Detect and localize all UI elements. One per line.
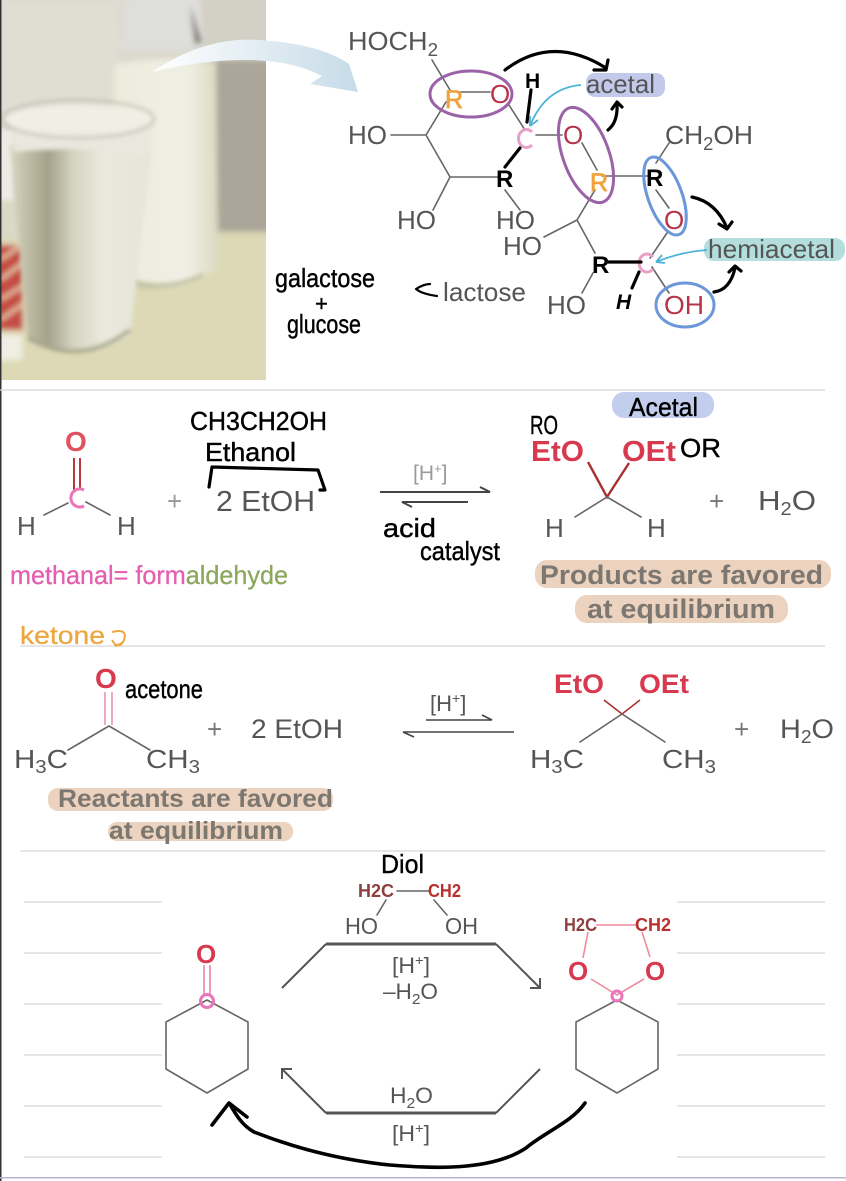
forward conditions: [H (392, 953, 414, 978)
acetone reactant: 3 (189, 757, 200, 777)
acetone reactant (14, 663, 203, 777)
ketal product (530, 669, 716, 777)
ketal product: C (563, 744, 584, 774)
water: H (758, 485, 778, 516)
black R marks and H marks: R (646, 165, 663, 192)
forward conditions: ] (424, 953, 430, 978)
diol reagent: Diol (381, 849, 424, 879)
water: O (792, 485, 816, 516)
reverse conditions: 2 (407, 1095, 415, 1112)
black hand-drawn return arrow (212, 1103, 585, 1167)
note: ketone: ketone (20, 622, 105, 650)
formaldehyde reactant: H (17, 511, 36, 541)
cyclic acetal product: O (645, 956, 665, 986)
plus sign: + (167, 486, 182, 516)
hemiacetal label: hemiacetal (708, 234, 835, 264)
acetone reactant: H (14, 744, 33, 774)
acetone reactant: O (95, 663, 117, 694)
reverse arrow (282, 1069, 540, 1113)
acetal product: H (647, 513, 666, 543)
reverse conditions: [H (392, 1121, 414, 1146)
reverse conditions: H (390, 1083, 406, 1108)
callout: reactants are favored: Reactants are favored (58, 785, 333, 813)
cyclic acetal product: CH2 (635, 915, 671, 935)
equilibrium arrows: reactants favored (403, 690, 514, 737)
CH2OH label: CH (665, 120, 703, 150)
acetal product (530, 410, 721, 543)
handwritten note: galactose + glucose: + (315, 291, 328, 316)
2 EtOH: 2 EtOH (251, 714, 343, 744)
diol reagent: HO (345, 913, 378, 939)
ketal product: 3 (705, 757, 716, 777)
forward conditions: + (415, 952, 424, 968)
lactose bonds (391, 60, 669, 293)
HO labels (348, 120, 586, 320)
black R marks and H marks: R (592, 252, 609, 279)
water: 2 (801, 727, 812, 747)
black R marks and H marks: H (525, 70, 540, 93)
acid catalyst note (383, 513, 501, 566)
HO labels: HO (348, 120, 387, 150)
note: methanal = formaldehyde: methanal= formaldehyde (10, 560, 288, 590)
CH2OH label: OH (713, 120, 753, 150)
acetone reactant: C (47, 744, 68, 774)
ring oxygens (490, 79, 704, 320)
acetal product: OEt (622, 436, 676, 468)
forward arrow (282, 944, 540, 988)
reverse conditions: + (415, 1120, 424, 1136)
diol reagent (345, 849, 478, 939)
equilibrium arrows: reactants favored: ] (460, 691, 466, 716)
acetal product: OR (680, 433, 721, 463)
2 EtOH with ethanol note: 2 EtOH (216, 486, 315, 518)
ring oxygens: O (490, 79, 510, 109)
callout: reactants are favored: at equilibrium (109, 817, 283, 845)
diol reagent: OH (445, 913, 478, 939)
acid catalyst note: catalyst (420, 536, 501, 566)
acetone reactant: CH (146, 744, 184, 774)
ketal product: 3 (551, 757, 563, 777)
ketal product: OEt (639, 669, 689, 699)
pink anomeric carbons (518, 130, 653, 272)
cyclohexanone: O (196, 939, 216, 969)
diol reagent: CH2 (428, 881, 461, 901)
orange R marks (445, 86, 608, 197)
acetone reactant: 3 (35, 757, 47, 777)
black arrow: down to hemiacetal (692, 197, 732, 229)
equilibrium arrows: reactants favored: [H (430, 691, 452, 716)
equilibrium arrows: products favored: [H (413, 462, 434, 485)
black R marks and H marks (496, 70, 663, 314)
orange R marks: R (590, 169, 608, 197)
blue circles: hemiacetal atoms (635, 152, 714, 327)
acetal label: acetal (586, 69, 655, 99)
cyan pointer: acetal to carbon (530, 85, 581, 126)
plus sign: + (709, 486, 724, 516)
equilibrium arrows: products favored: + (434, 461, 442, 476)
cyclic acetal product: H2C (564, 915, 597, 935)
forward conditions: O (420, 979, 438, 1004)
ketal product: CH (662, 744, 700, 774)
HO labels: HO (496, 205, 535, 235)
forward conditions: –H (383, 979, 411, 1004)
acid catalyst note: acid (383, 513, 436, 543)
equilibrium arrows: products favored (380, 461, 490, 507)
plus sign: + (207, 714, 222, 744)
water: O (812, 714, 834, 744)
lactose structure (348, 26, 753, 327)
2 EtOH with ethanol note: CH3CH2OH (190, 406, 327, 436)
plus sign: + (734, 714, 749, 744)
thick bonds to H and R (505, 90, 641, 288)
water: 2 (781, 499, 792, 519)
formaldehyde reactant: O (65, 426, 87, 457)
arrow: photo to lactose structure (152, 40, 358, 92)
HO labels: HO (503, 231, 542, 261)
black R marks and H marks: H (616, 291, 632, 314)
photo: glass and bottle of milk (0, 0, 275, 387)
handwritten note: galactose + glucose (275, 263, 375, 339)
callout: reactants are favored (48, 785, 333, 845)
black arrow: oxygen to acetal (505, 51, 608, 70)
HO labels: HO (547, 290, 586, 320)
cyan pointer: hemiacetal to carbon (656, 250, 707, 263)
callout: products are favored (535, 560, 831, 624)
handwritten note: galactose + glucose: glucose (287, 309, 361, 339)
ring oxygens: OH (664, 290, 704, 320)
HOCH2 label: 2 (428, 40, 438, 60)
water: H (780, 714, 800, 744)
equilibrium arrows: reactants favored: + (452, 690, 460, 706)
bottom rule (0, 1177, 846, 1178)
left page edge (0, 0, 2, 1181)
cyclic acetal product (564, 915, 671, 1093)
2 EtOH with ethanol note (190, 406, 327, 518)
cyclic acetal product: O (568, 956, 588, 986)
callout: products are favored: Products are favored (540, 560, 823, 590)
formaldehyde reactant (17, 426, 136, 541)
callout: products are favored: at equilibrium (587, 594, 775, 624)
acetone reactant: acetone (125, 674, 203, 704)
equilibrium arrows: products favored: ] (442, 462, 447, 485)
acetal product: EtO (531, 436, 584, 468)
reverse conditions: ] (424, 1121, 430, 1146)
reverse conditions (390, 1083, 433, 1146)
formaldehyde reactant: H (117, 511, 136, 541)
reverse conditions: O (415, 1083, 433, 1108)
forward conditions: 2 (412, 991, 420, 1008)
cyclohexanone (166, 939, 248, 1093)
acetal tag: Acetal (629, 392, 698, 422)
ring oxygens: O (563, 120, 583, 150)
CH2OH label: 2 (703, 134, 713, 154)
lactose label: lactose (443, 277, 526, 307)
acetal product: H (545, 513, 564, 543)
handwritten note: galactose + glucose: galactose (275, 263, 375, 293)
black arrow: up to acetal (608, 102, 622, 130)
ring oxygens: O (664, 205, 684, 235)
acetal product: RO (530, 410, 558, 440)
HOCH2 label: HOCH (348, 26, 425, 56)
ketal product: EtO (554, 669, 604, 699)
ketal product: H (530, 744, 549, 774)
HO labels: HO (397, 205, 436, 235)
purple circles: acetal atoms (430, 71, 625, 210)
orange R marks: R (445, 86, 463, 114)
black R marks and H marks: R (496, 166, 513, 193)
forward conditions (383, 952, 438, 1008)
diol reagent: H2C (358, 881, 394, 901)
2 EtOH with ethanol note: Ethanol (205, 437, 296, 467)
black arrow: up to hemiacetal (714, 266, 741, 292)
divider lines (0, 390, 825, 1157)
